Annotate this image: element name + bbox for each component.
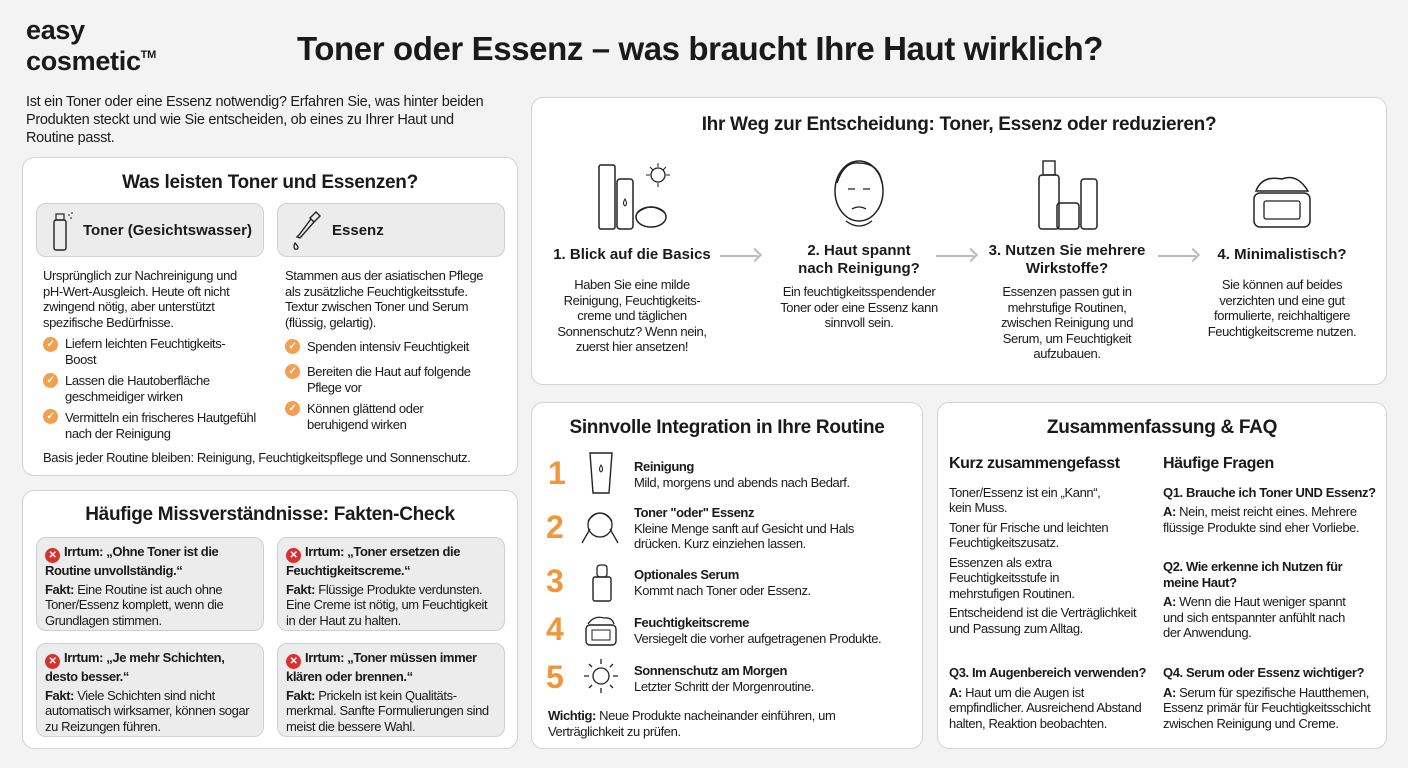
step 2: nach Reinigung? (798, 260, 920, 277)
faq Q4: Q4. Serum oder Essenz wichtiger? (1163, 665, 1364, 680)
panel: Integration in Routine (531, 402, 923, 749)
summary column: Essenzen als extra Feuchtigkeitsstufe in mehrstufigen Routinen. (949, 554, 1075, 600)
heading: Häufige Missverständnisse: Fakten-Check (85, 504, 455, 525)
step 3 (989, 160, 1145, 361)
list: essenz benefits: ✓ (288, 366, 296, 377)
title: Toner oder Essenz – was braucht Ihre Haut wirklich? (297, 30, 1103, 67)
myth 4: Irrtum: „Toner müssen immer klären oder brennen.“ (286, 650, 477, 684)
myth 3: Irrtum: „Je mehr Schichten, desto besser.“ (45, 650, 224, 684)
step 4: 4. Minimalistisch? (1217, 246, 1347, 263)
summary column (949, 455, 1136, 636)
step 4 row: Versiegelt die vorher aufgetragenen Produkte. (634, 630, 881, 646)
panel: Weg zur Entscheidung (531, 97, 1387, 385)
list: toner benefits: Liefern leichten Feuchtigkeits-Boost (65, 336, 225, 366)
intro text: Ist ein Toner oder eine Essenz notwendig? Erfahren Sie, was hinter beiden Produkten steckt und wie Sie entscheiden, ob eines zu Ihrer Haut und Routine passt. (26, 94, 483, 146)
step 1 row: Reinigung (634, 459, 694, 474)
step 2 row: 2 (546, 509, 564, 545)
step 3 row: Optionales Serum (634, 567, 739, 582)
myth 3: Fakt: Viele Schichten sind nicht automatisch wirksamer, können sogar zu Reizungen führen. (45, 688, 249, 734)
panel: Was leisten Toner und Essenzen (22, 157, 518, 476)
summary column: Kurz zusammengefasst (949, 455, 1120, 472)
arrow 3 (1158, 255, 1196, 257)
card: essenz: Essenz (332, 222, 384, 239)
list: essenz benefits: Können glättend oder beruhigend wirken (307, 401, 423, 432)
step 3: Wirkstoffe? (1026, 260, 1108, 277)
myth 1: ✕ (48, 550, 56, 561)
note: Wichtig: Neue Produkte nacheinander einführen, um Verträglichkeit zu prüfen. (548, 708, 835, 738)
myth 4: ✕ (290, 656, 297, 667)
icon: sun (584, 659, 618, 693)
myth 2 (277, 537, 505, 631)
step 2: 2. Haut spannt (807, 242, 911, 259)
heading: Sinnvolle Integration in Ihre Routine (569, 417, 885, 438)
myth 1: Irrtum: „Ohne Toner ist die Routine unvollständig.“ (45, 544, 218, 578)
faq column: Häufige Fragen (1163, 455, 1274, 472)
step 3 row: 3 (546, 563, 564, 599)
faq Q4: A: Serum für spezifische Hautthemen, Essenz primär für Feuchtigkeitsschicht zwischen Reinigung und Creme. (1163, 684, 1370, 730)
faq column: Q1. Brauche ich Toner UND Essenz? (1163, 484, 1376, 500)
step 2 row: Kleine Menge sanft auf Gesicht und Hals drücken. Kurz einziehen lassen. (634, 520, 854, 551)
step 2 row: Toner "oder" Essenz (634, 505, 754, 520)
text: essenz description: Stammen aus der asiatischen Pflege als zusätzliche Feuchtigkeitsstufe. Textur zwischen Toner und Serum (flüssig, gelartig). (285, 268, 483, 330)
text: toner description: Ursprünglich zur Nachreinigung und pH-Wert-Ausgleich. Heute oft nicht zwingend nötig, aber unterstützt spezifische Bedürfnisse. (43, 268, 237, 330)
faq Q3: Q3. Im Augenbereich verwenden? (949, 665, 1146, 680)
list: essenz benefits: ✓ (288, 341, 296, 352)
icon: cream jar (1253, 176, 1311, 228)
icon: face washing (582, 512, 618, 544)
heading: Ihr Weg zur Entscheidung: Toner, Essenz oder reduzieren? (702, 114, 1216, 135)
card: toner (36, 203, 264, 257)
myth 3 (36, 643, 264, 737)
myth 3: ✕ (48, 656, 56, 667)
list: toner benefits: ✓ (46, 339, 54, 350)
myth 2: Fakt: Flüssige Produkte verdunsten. Eine Creme ist nötig, um Feuchtigkeit in der Haut zu halten. (286, 582, 487, 628)
myth 2: ✕ (290, 550, 297, 561)
list: essenz benefits: Spenden intensiv Feuchtigkeit (307, 339, 469, 354)
step 2 (780, 160, 938, 330)
icon: toner bottle (53, 212, 73, 251)
step 2 row (546, 505, 854, 551)
logo (26, 15, 156, 76)
card: essenz (277, 203, 505, 257)
list: essenz benefits: Bereiten die Haut auf folgende Pflege vor (307, 364, 471, 394)
faq Q3 (949, 665, 1146, 730)
step 1: 1. Blick auf die Basics (553, 246, 711, 263)
faq column: Q2. Wie erkenne ich Nutzen für meine Haut? (1163, 559, 1342, 590)
step 2: Ein feuchtigkeitsspendender Toner oder eine Essenz kann sinnvoll sein. (780, 284, 938, 330)
faq column: A: Wenn die Haut weniger spannt und sich entspannter anfühlt nach der Anwendung. (1163, 594, 1345, 640)
faq Q3: A: Haut um die Augen ist empfindlicher. Ausreichend Abstand halten, Reaktion beobachten. (949, 684, 1141, 730)
logo: easy (26, 15, 85, 45)
step 1 row (548, 452, 850, 494)
list: toner benefits: ✓ (46, 375, 54, 386)
myth 4: Fakt: Prickeln ist kein Qualitäts-merkmal. Sanfte Formulierungen sind meist die bessere Wahl. (286, 688, 489, 734)
list: toner benefits: Lassen die Hautoberfläche geschmeidiger wirken (65, 373, 210, 404)
step 3: Essenzen passen gut in mehrstufige Routinen, zwischen Reinigung und Serum, um Feuchtigkeit aufzubauen. (1001, 284, 1133, 361)
myth 2: Irrtum: „Toner ersetzen die Feuchtigkeitscreme.“ (286, 544, 460, 578)
icon: tube (589, 452, 613, 494)
step 5 row: Letzter Schritt der Morgenroutine. (634, 678, 814, 694)
panel: Missverständnisse (22, 490, 518, 749)
summary column: Toner/Essenz ist ein „Kann“, kein Muss. (949, 484, 1100, 515)
summary column: Entscheidend ist die Verträglichkeit und Passung zum Alltag. (949, 605, 1136, 636)
faq column (1163, 455, 1376, 640)
myth 4 (277, 643, 505, 737)
step 3 row (546, 563, 811, 602)
heading: Was leisten Toner und Essenzen? (122, 172, 418, 193)
step 5 row: 5 (546, 659, 564, 695)
step 1 (553, 163, 711, 354)
step 1 row: 1 (548, 455, 566, 491)
step 3 row: Kommt nach Toner oder Essenz. (634, 582, 811, 598)
faq column: A: Nein, meist reicht eines. Mehrere flüssige Produkte sind eher Vorliebe. (1163, 504, 1359, 534)
logo: cosmeticTM (26, 46, 156, 76)
footer note: Basis jeder Routine bleiben: Reinigung, Feuchtigkeitspflege und Sonnenschutz. (43, 450, 470, 465)
heading: Zusammenfassung & FAQ (1047, 417, 1277, 438)
step 1: Haben Sie eine milde Reinigung, Feuchtigkeits-creme und täglichen Sonnenschutz? Wenn nein, zuerst hier ansetzen! (557, 277, 707, 354)
myth 1 (36, 537, 264, 631)
arrow 2 (936, 255, 974, 257)
myth 1: Fakt: Eine Routine ist auch ohne Toner/Essenz komplett, wenn die Grundlagen stimmen. (45, 582, 223, 628)
panel: Zusammenfassung & FAQ (937, 402, 1387, 749)
step 4: Sie können auf beides verzichten und eine gut formulierte, reichhaltigere Feuchtigkeitscreme nutzen. (1208, 277, 1356, 338)
step 4 (1208, 176, 1356, 338)
list: toner benefits: ✓ (46, 411, 54, 422)
step 3: 3. Nutzen Sie mehrere (989, 242, 1145, 259)
arrow 1 (720, 255, 758, 257)
list: toner benefits: Vermitteln ein frischeres Hautgefühl nach der Reinigung (65, 410, 256, 440)
icon: multiple products (1038, 160, 1098, 230)
icon: serum bottle (592, 564, 612, 602)
step 5 row: Sonnenschutz am Morgen (634, 663, 787, 678)
card: toner: Toner (Gesichtswasser) (83, 222, 252, 239)
list: toner benefits (43, 336, 256, 440)
icon: face (834, 160, 884, 227)
icon: jar (585, 616, 617, 646)
icon: dropper (293, 211, 321, 250)
icon: basics products (598, 163, 670, 230)
summary column: Toner für Frische und leichten Feuchtigkeitszusatz. (949, 520, 1108, 550)
step 4 row (546, 611, 881, 647)
list: essenz benefits: ✓ (288, 403, 296, 414)
list: essenz benefits (285, 339, 471, 432)
step 5 row (546, 659, 814, 695)
step 4 row: 4 (546, 611, 564, 647)
step 1 row: Mild, morgens und abends nach Bedarf. (634, 474, 850, 490)
step 4 row: Feuchtigkeitscreme (634, 615, 749, 630)
